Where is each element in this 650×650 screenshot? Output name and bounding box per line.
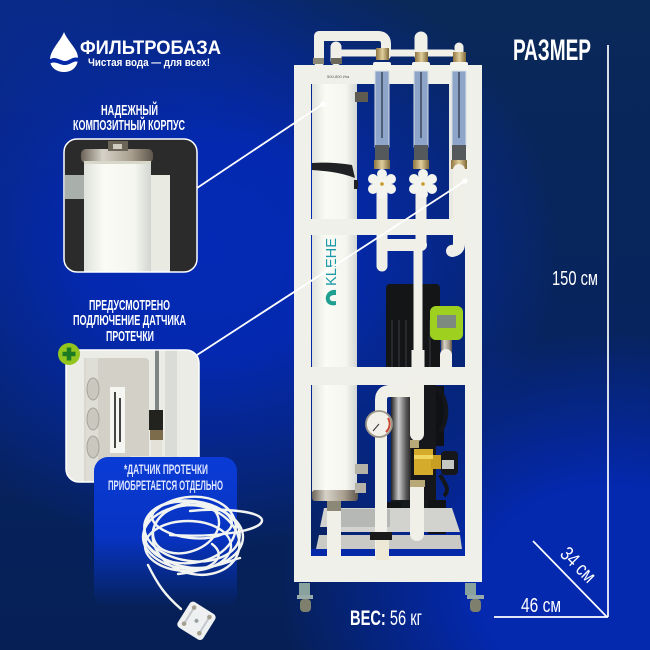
valve 2	[409, 169, 437, 199]
digital controller	[430, 306, 463, 366]
icon: coiled leak sensor cable	[140, 491, 262, 609]
hand valves	[368, 169, 437, 199]
flow meter 3	[450, 62, 468, 169]
leader line: composite housing	[197, 101, 326, 188]
label: depth: 34 см	[555, 543, 600, 588]
top pipework	[313, 36, 466, 64]
pump body	[387, 385, 446, 534]
heading: leak sensor connection: ПОДЛЮЧЕНИЕ ДАТЧИКА	[73, 313, 186, 329]
cables	[436, 387, 447, 496]
valve 1	[368, 169, 396, 199]
membrane housing	[312, 84, 368, 557]
base tray	[311, 508, 465, 556]
brand name: ФИЛЬТРОБАЗА	[80, 38, 221, 59]
icon: leak sensor plate	[176, 600, 217, 642]
product: reverse osmosis unit	[294, 36, 484, 612]
brass solenoid valve	[414, 449, 458, 475]
lower pipework	[382, 170, 459, 367]
icon: green plus badge	[58, 343, 80, 365]
caster right	[465, 583, 484, 612]
housing brand mark: KLEHE	[323, 238, 340, 286]
frame	[294, 65, 482, 582]
flow meter 1	[373, 62, 391, 169]
callout text: *ДАТЧИК ПРОТЕЧКИ	[124, 461, 208, 477]
callout panel: leak sensor sold separately	[94, 457, 262, 642]
heading: composite housing	[73, 101, 185, 134]
caster left	[297, 583, 313, 612]
callout text: ПРИОБРЕТАЕТСЯ ОТДЕЛЬНО	[108, 477, 223, 493]
pump motor	[386, 284, 440, 369]
tagline: Чистая вода — для всех!	[88, 57, 210, 69]
panel: composite housing photo	[64, 139, 197, 273]
lower plumbing	[370, 385, 425, 560]
icon: brand leaf	[326, 290, 336, 305]
flow meter 2	[412, 62, 430, 169]
pressure gauge	[366, 411, 392, 437]
leader line: sensor connection	[197, 178, 468, 355]
label: width: 46 см	[521, 595, 561, 617]
third tube behind frame	[449, 84, 465, 219]
panel: sensor connection photo	[66, 350, 199, 482]
logo	[49, 32, 221, 72]
heading: leak sensor connection	[73, 298, 186, 345]
dimension lines	[494, 45, 608, 617]
label: weight: ВЕС: 56 кг	[350, 607, 422, 630]
label: height: 150 см	[552, 268, 598, 290]
frame label: 500-800 l/ha	[327, 74, 350, 79]
heading: composite housing: НАДЕЖНЫЙ	[101, 101, 158, 119]
heading: leak sensor connection: ПРЕДУСМОТРЕНО	[89, 298, 170, 314]
icon: water drop	[49, 32, 79, 72]
callout text	[108, 461, 223, 493]
heading: composite housing: КОМПОЗИТНЫЙ КОРПУС	[73, 116, 185, 134]
heading: size: РАЗМЕР	[513, 34, 591, 67]
heading: leak sensor connection: ПРОТЕЧКИ	[106, 329, 154, 345]
